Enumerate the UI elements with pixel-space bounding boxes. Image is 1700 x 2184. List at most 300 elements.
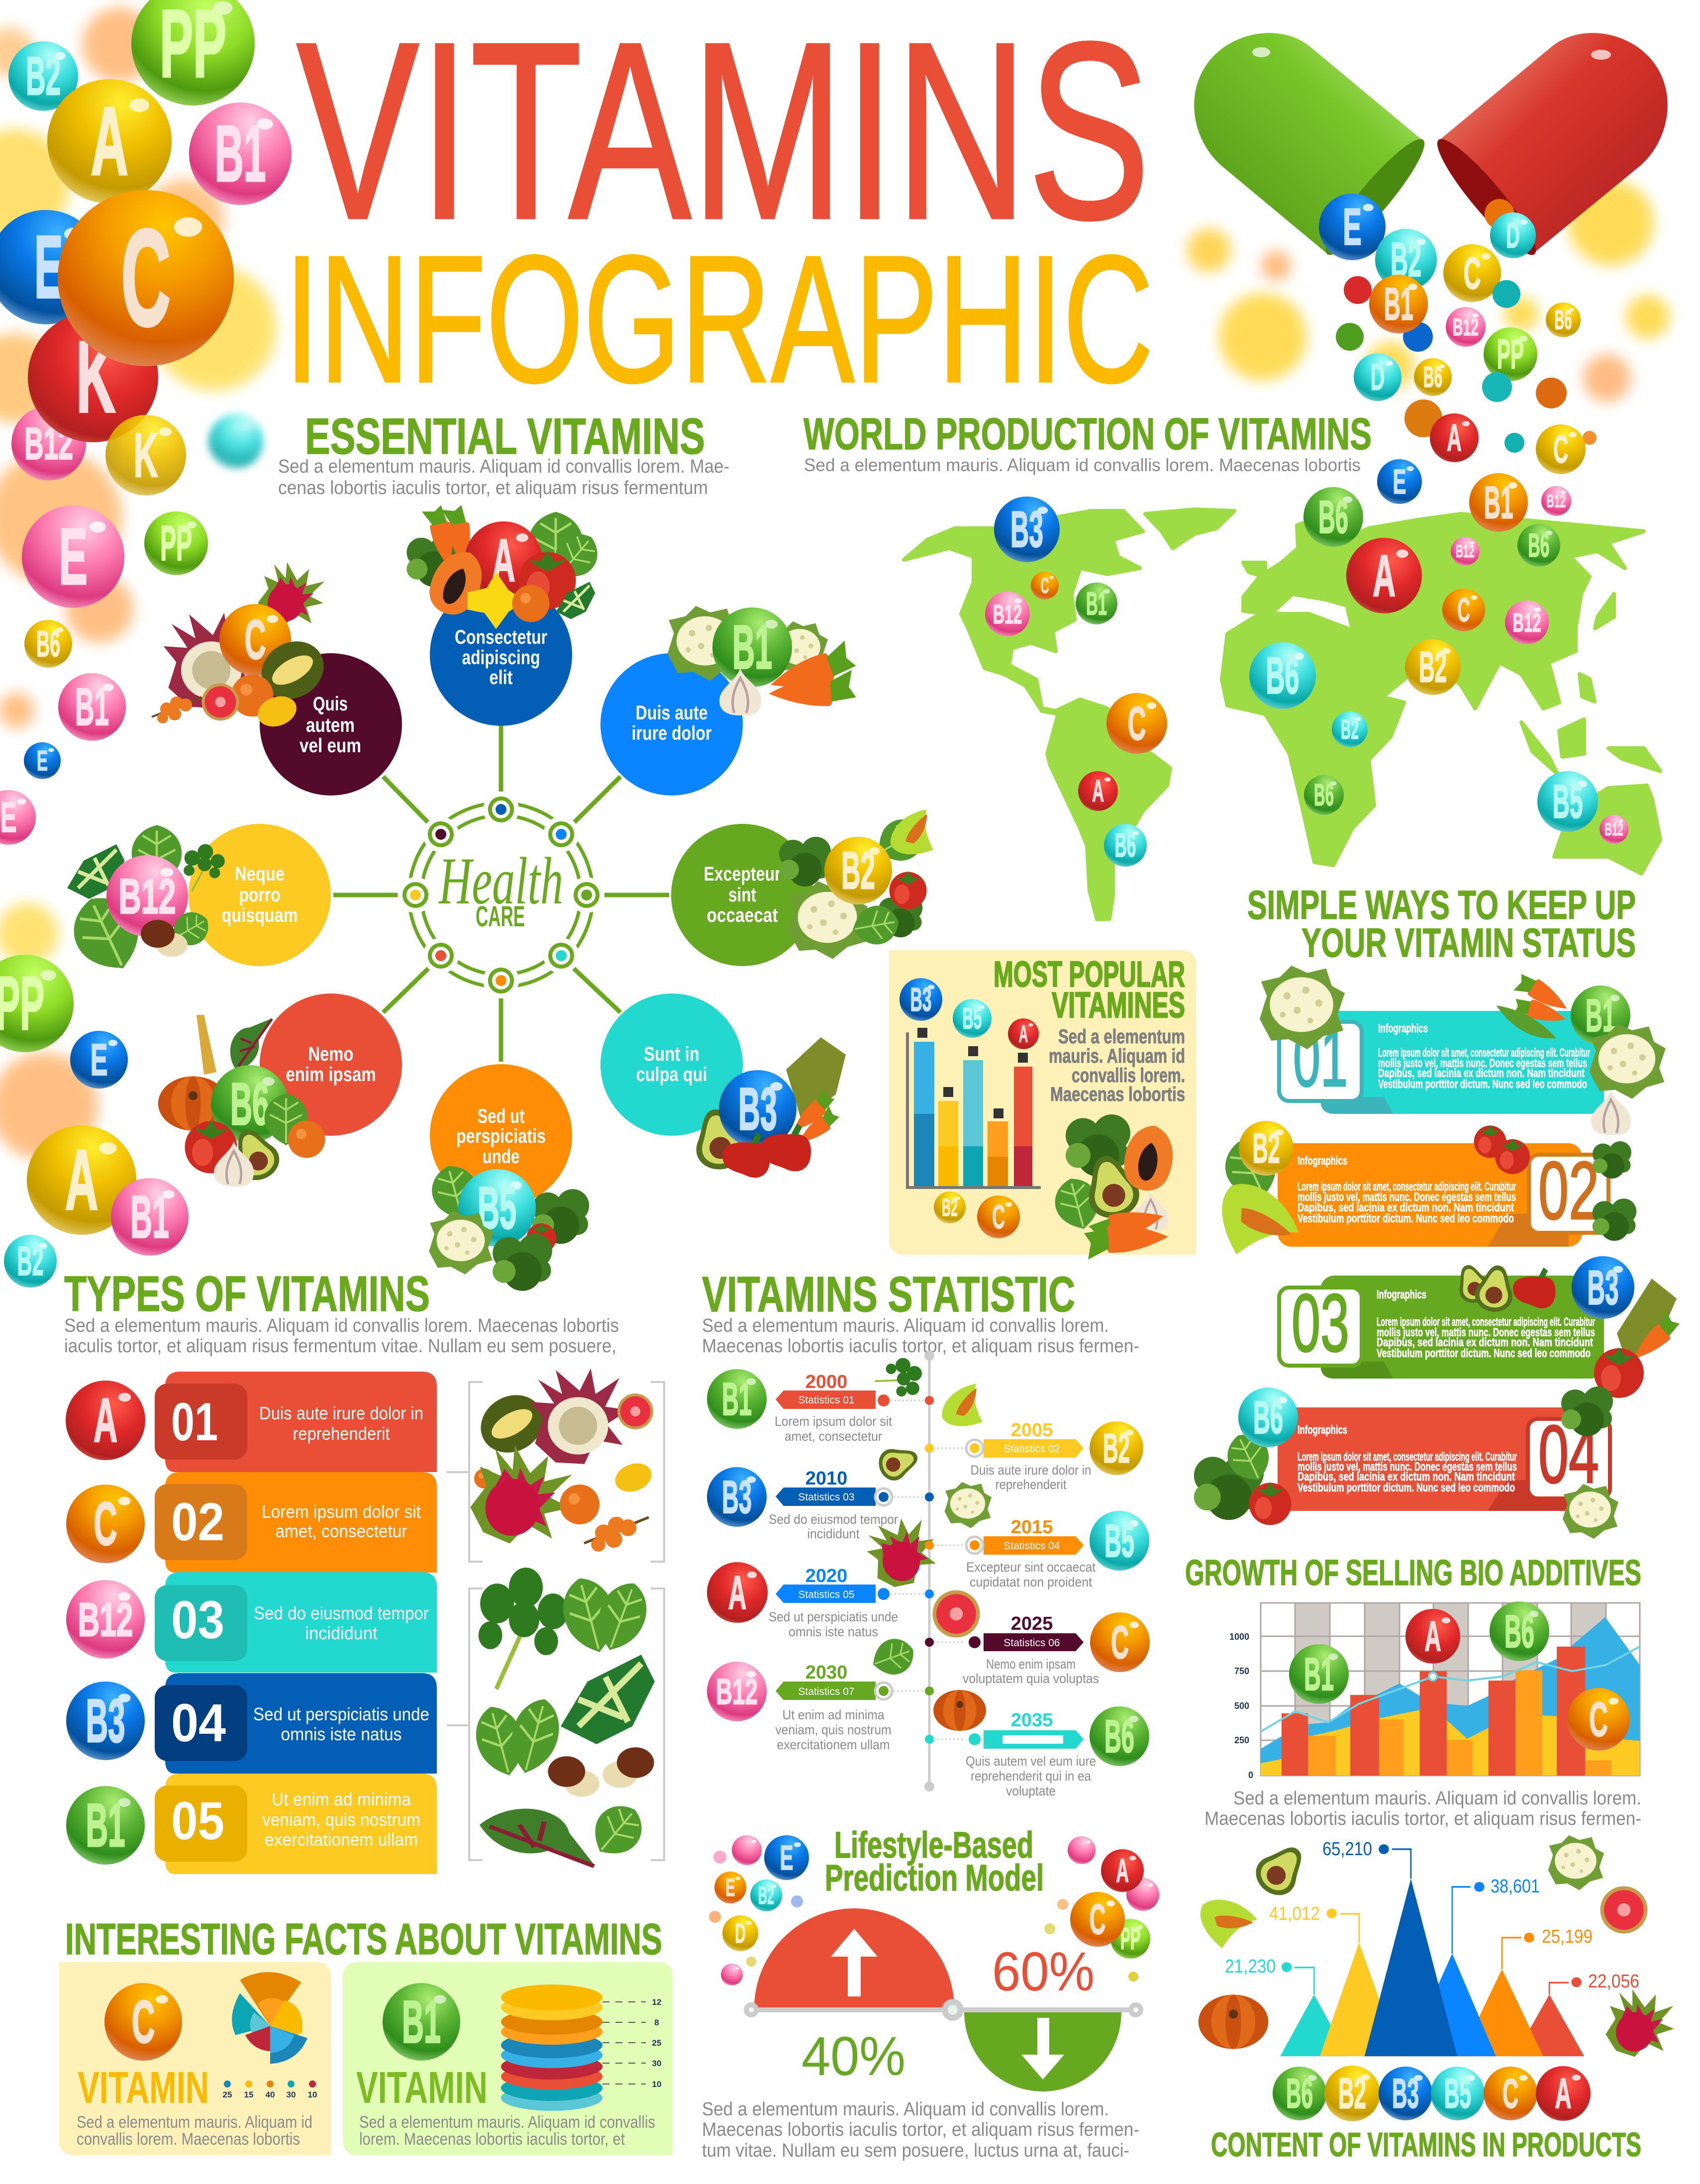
circle: sunt in culpa qui: culpa qui xyxy=(636,1064,707,1086)
text: statistic description: Sed a elementum mauris. Aliquam id convallis lorem. xyxy=(702,1315,1109,1336)
step 04 ribbon xyxy=(1194,1387,1618,1539)
cluster: vitamin B12 foods: B12 xyxy=(119,869,176,923)
chart: growth chart: B6 xyxy=(1504,1605,1534,1657)
text: lifestyle description: Sed a elementum mauris. Aliquam id convallis lorem. xyxy=(702,2099,1109,2120)
row of vitamin balls: A xyxy=(1555,2070,1571,2117)
step 03 ribbon: Vestibulum porttitor dictum. Nunc sed leo commodo xyxy=(1377,1347,1591,1360)
top-left vitamin bubbles: A xyxy=(91,88,128,195)
chart: growth chart: 1000 xyxy=(1229,1632,1249,1642)
chart: world map with vitamin balls: C xyxy=(1128,697,1146,750)
legend: polar pie xyxy=(223,2081,317,2099)
heading: lifestyle-based prediction model xyxy=(825,1824,1044,1898)
2020: Sed ut perspiciatis unde xyxy=(769,1609,898,1624)
item 05 xyxy=(66,1774,437,1874)
heading: lifestyle-based prediction model: Prediction Model xyxy=(825,1857,1044,1898)
chart: world map with vitamin balls: B6 xyxy=(1528,527,1550,564)
2030: B12 xyxy=(716,1672,758,1712)
step 03 ribbon xyxy=(1279,1256,1683,1398)
step 03 ribbon: Infographics xyxy=(1377,1288,1426,1301)
cluster: vitamin C foods: C xyxy=(244,608,266,671)
2020: Statistics 05 xyxy=(798,1589,855,1600)
2005: B2 xyxy=(1103,1425,1130,1472)
cluster: vitamin A foods xyxy=(406,504,607,629)
chart: timeline xyxy=(707,1351,1150,1798)
text: most popular description: mauris. Aliquam id xyxy=(1049,1045,1185,1067)
chart: world map with vitamin balls: B6 xyxy=(1318,491,1348,543)
panel: vitamin B1 fact: VITAMIN xyxy=(356,2063,488,2113)
2035: voluptate xyxy=(1006,1784,1056,1798)
illustration: open capsule pouring vitamins: E xyxy=(1343,199,1362,256)
row of vitamin balls: B5 xyxy=(1444,2070,1471,2117)
bubbles: left of lifestyle model: E xyxy=(780,1838,794,1877)
text: lifestyle description: tum vitae. Nullam eu sem posuere, luctus urna at, fauci- xyxy=(702,2140,1129,2161)
2020: omnis iste natus xyxy=(789,1624,878,1639)
cluster: foods xyxy=(1050,1114,1178,1260)
legend: polar pie: 40 xyxy=(266,2090,275,2099)
center label: health care xyxy=(438,844,563,933)
labels: stacked discs: 10 xyxy=(652,2080,661,2089)
2020: A xyxy=(728,1566,746,1619)
circle: excepteur sint occaecat: occaecat xyxy=(706,904,778,926)
center label: health care: Health xyxy=(438,844,563,918)
2035: Statistics 08 xyxy=(1003,1734,1060,1746)
row of vitamin balls: C xyxy=(1502,2070,1518,2117)
item 02: C xyxy=(94,1489,117,1558)
heading: vitamins statistic: VITAMINS STATISTIC xyxy=(702,1267,1075,1322)
item 04 xyxy=(66,1673,437,1774)
list: types of vitamins xyxy=(66,1372,437,1874)
text: most popular description: convallis lorem. xyxy=(1072,1065,1185,1087)
chart: world map with vitamin balls: B6 xyxy=(1314,778,1334,812)
cluster: vitamin B1 foods: B1 xyxy=(732,613,772,682)
2010: Sed do eiusmod tempor xyxy=(769,1512,898,1527)
legend: polar pie: 30 xyxy=(287,2090,296,2099)
labels: stacked discs: 30 xyxy=(652,2059,661,2068)
2035: Quis autem vel eum iure xyxy=(966,1754,1096,1769)
step 02 ribbon: Vestibulum porttitor dictum. Nunc sed leo commodo xyxy=(1298,1212,1514,1225)
chart: content of vitamins triangles: 41,012 xyxy=(1269,1903,1320,1924)
item 01 xyxy=(66,1372,437,1472)
2025: C xyxy=(1111,1616,1129,1668)
text: types description: iaculis tortor, et aliquam risus fermentum vitae. Nullam eu sem posuere, xyxy=(64,1336,616,1357)
chart: world map with vitamin balls: B3 xyxy=(1010,500,1043,558)
labels: stacked discs xyxy=(602,1997,661,2089)
2005: Statistics 02 xyxy=(1003,1443,1060,1455)
chart: content of vitamins triangles: 21,230 xyxy=(1225,1956,1276,1977)
text: growth description: Sed a elementum mauris. Aliquam id convallis lorem. xyxy=(1233,1788,1641,1809)
2030: exercitationem ullam xyxy=(777,1737,890,1752)
circle: neque porro quisquam xyxy=(189,824,331,966)
top-left vitamin bubbles xyxy=(0,0,292,585)
labels: stacked discs: 12 xyxy=(652,1997,661,2007)
circle: sed ut perspiciatis unde: perspiciatis xyxy=(456,1125,546,1147)
chart: world map with vitamin balls: C xyxy=(1457,592,1470,629)
number: 40 percent: 40% xyxy=(801,2026,905,2087)
illustration: open capsule pouring vitamins: A xyxy=(1447,417,1462,459)
heading: most popular vitamines xyxy=(994,955,1185,1025)
circle: quis autem vel eum xyxy=(260,653,402,795)
text: essential vitamins description: cenas lobortis iaculis tortor, et aliquam risus fermentum xyxy=(278,478,708,498)
text: world production description: Sed a elementum mauris. Aliquam id convallis lorem. Maecenas lobortis xyxy=(804,455,1361,475)
chart: world map with vitamin balls: B2 xyxy=(1341,713,1359,745)
2010: B3 xyxy=(722,1471,752,1523)
chart: growth chart: 0 xyxy=(1248,1770,1253,1780)
panel: vitamin C fact: VITAMIN xyxy=(78,2063,209,2113)
circle: nemo enim ipsam: Nemo xyxy=(308,1043,353,1065)
illustration: open capsule pouring vitamins: C xyxy=(1553,428,1568,471)
heading: essential vitamins: ESSENTIAL VITAMINS xyxy=(305,408,705,465)
left column vitamin bubbles: B1 xyxy=(75,678,109,736)
top-left vitamin bubbles: B12 xyxy=(24,419,73,469)
step 02 ribbon: Lorem ipsum dolor sit amet, consectetur adipiscing elit. Curabitur xyxy=(1298,1180,1516,1193)
2010: incididunt xyxy=(807,1526,860,1541)
item 01: reprehenderit xyxy=(293,1423,390,1444)
2030: Ut enim ad minima xyxy=(782,1707,885,1722)
foods for step 03: B3 xyxy=(1588,1260,1618,1314)
2020 xyxy=(707,1562,934,1639)
bracket: vegetables xyxy=(447,1568,664,1867)
top-left vitamin bubbles: B1 xyxy=(214,109,266,198)
bubbles: left of lifestyle model: E xyxy=(725,1874,735,1901)
circle: excepteur sint occaecat: sint xyxy=(728,884,756,906)
step 03 ribbon: mollis justo vel, mattis nunc. Donec egestas sem tellus xyxy=(1377,1326,1595,1339)
text: types description xyxy=(64,1315,619,1357)
panel: vitamin C fact xyxy=(59,1962,331,2155)
top-left vitamin bubbles: C xyxy=(121,202,171,354)
left column vitamin bubbles: B1 xyxy=(130,1183,169,1250)
2005: reprehenderit xyxy=(995,1477,1067,1492)
foods for step 01 xyxy=(1260,966,1666,1135)
step 04 ribbon: Dapibus, sed lacinia ex dictum non. Nam tincidunt xyxy=(1298,1470,1515,1484)
chart: growth chart: 500 xyxy=(1234,1701,1249,1711)
text: types description: Sed a elementum mauris. Aliquam id convallis lorem. Maecenas lobortis xyxy=(64,1315,619,1336)
text: growth description xyxy=(1204,1788,1641,1829)
foods for step 04 xyxy=(1194,1387,1618,1539)
item 03 xyxy=(66,1572,437,1673)
2025: 2025 xyxy=(1011,1613,1053,1634)
chart: world map with vitamin balls: B12 xyxy=(1546,491,1566,511)
text: lifestyle description xyxy=(702,2099,1139,2161)
2025: Nemo enim ipsam xyxy=(986,1657,1076,1672)
top-left vitamin bubbles: K xyxy=(134,420,158,490)
chart: world map with vitamin balls: B5 xyxy=(1552,775,1583,828)
bubbles: left of lifestyle model xyxy=(709,1835,809,1985)
legend: polar pie: 15 xyxy=(244,2090,253,2099)
item 02: Lorem ipsum dolor sit xyxy=(262,1501,421,1522)
2000: 2000 xyxy=(805,1372,847,1392)
icons: popular vitamins: B5 xyxy=(963,1001,982,1035)
cluster: vitamin B5 foods xyxy=(426,1160,589,1291)
2015: 2015 xyxy=(1011,1517,1053,1538)
cluster: vitamin B1 foods xyxy=(668,606,858,715)
illustration: open capsule pouring vitamins: B1 xyxy=(1384,279,1413,329)
circle: quis autem vel eum: Quis xyxy=(313,693,348,715)
2010: 2010 xyxy=(805,1468,847,1489)
chart: world map with vitamin balls: B2 xyxy=(1419,643,1447,692)
chart: world map with vitamin balls: A xyxy=(1373,542,1396,608)
cluster: vitamin B6 foods: B6 xyxy=(230,1070,269,1137)
step 01 ribbon: Dapibus, sed lacinia ex dictum non. Nam tincidunt xyxy=(1378,1067,1585,1080)
step 01 ribbon: Vestibulum porttitor dictum. Nunc sed leo commodo xyxy=(1378,1078,1587,1091)
2030: veniam, quis nostrum xyxy=(775,1722,892,1737)
2005: Duis aute irure dolor in xyxy=(970,1463,1092,1478)
number: 60 percent: 60% xyxy=(992,1941,1095,2002)
2015: cupidatat non proident xyxy=(970,1575,1092,1589)
step 02 ribbon xyxy=(1216,1121,1636,1256)
bubbles: right of lifestyle model: A xyxy=(1116,1853,1129,1889)
left column vitamin bubbles: A xyxy=(65,1133,98,1227)
left column vitamin bubbles: B6 xyxy=(36,623,60,664)
illustration: open capsule pouring vitamins: D xyxy=(1371,356,1385,397)
icons: popular vitamins xyxy=(900,978,1039,1238)
2025 xyxy=(925,1612,1150,1686)
text: lifestyle description: Maecenas lobortis iaculis tortor, et aliquam risus fermen- xyxy=(702,2119,1139,2140)
2000: Statistics 01 xyxy=(798,1394,855,1406)
icons: popular vitamins: C xyxy=(992,1199,1005,1236)
item 01: 01 xyxy=(171,1391,218,1452)
circle: consectetur adipiscing elit xyxy=(430,584,572,726)
2035 xyxy=(925,1706,1149,1798)
text: statistic description xyxy=(702,1315,1139,1357)
circle: sunt in culpa qui: Sunt in xyxy=(644,1043,700,1065)
circle: duis aute irure dolor: irure dolor xyxy=(632,722,711,744)
2015 xyxy=(925,1511,1149,1589)
2015: Excepteur sint occaecat xyxy=(966,1560,1096,1575)
item 05: B1 xyxy=(86,1791,125,1859)
chart: polar pie xyxy=(232,1972,307,2064)
circle: sed ut perspiciatis unde: unde xyxy=(483,1146,519,1168)
circle: sed ut perspiciatis unde: Sed ut xyxy=(478,1105,524,1127)
2020: 2020 xyxy=(805,1566,847,1587)
item 03: 03 xyxy=(171,1589,224,1650)
row of vitamin balls: B6 xyxy=(1286,2070,1313,2117)
row of vitamin balls: B3 xyxy=(1392,2070,1419,2117)
bubbles: right of lifestyle model xyxy=(1044,1836,1159,1982)
text: essential vitamins description xyxy=(278,456,729,498)
top-left vitamin bubbles: B2 xyxy=(26,46,61,106)
2015: Statistics 04 xyxy=(1003,1540,1060,1552)
item 05: veniam, quis nostrum xyxy=(262,1809,420,1830)
chart: stacked discs xyxy=(501,1985,602,2111)
left column vitamin bubbles: B2 xyxy=(17,1239,43,1284)
step 02 ribbon: mollis justo vel, mattis nunc. Donec egestas sem tellus xyxy=(1298,1191,1516,1204)
bracket: fruits xyxy=(447,1369,664,1562)
cluster: vitamin B3 foods: B3 xyxy=(738,1075,777,1142)
foods for step 02: B2 xyxy=(1253,1125,1280,1172)
legend: polar pie: 10 xyxy=(308,2090,317,2099)
text: essential vitamins description: Sed a elementum mauris. Aliquam id convallis lorem. Mae- xyxy=(278,456,729,477)
item 04: 04 xyxy=(171,1692,226,1753)
2030: 2030 xyxy=(805,1662,847,1683)
item 05: exercitationem ullam xyxy=(265,1829,418,1850)
2005: 2005 xyxy=(1011,1420,1053,1441)
step 02 ribbon: Infographics xyxy=(1298,1154,1347,1168)
heading: world production of vitamins: WORLD PRODUCTION OF VITAMINS xyxy=(803,409,1372,459)
circle: excepteur sint occaecat: Excepteur xyxy=(703,863,781,885)
text: most popular description: Maecenas lobortis xyxy=(1050,1084,1185,1105)
center label: health care: CARE xyxy=(476,900,525,933)
cluster: vitamin B2 foods: B2 xyxy=(841,842,875,900)
chart: growth chart: A xyxy=(1425,1613,1441,1660)
foods for step 04: B6 xyxy=(1253,1391,1283,1443)
bubbles: right of lifestyle model: PP xyxy=(1120,1922,1140,1956)
chart: world map with vitamin balls: C xyxy=(1041,574,1049,598)
panel: vitamin C fact: convallis lorem. Maecenas lobortis xyxy=(77,2130,300,2149)
2035: 2035 xyxy=(1011,1710,1053,1731)
step 01 ribbon xyxy=(1260,966,1666,1135)
item 05: 05 xyxy=(171,1790,224,1851)
panel: vitamin B1 fact: lorem. Maecenas lobortis iaculis tortor, et xyxy=(359,2130,625,2149)
circle: sunt in culpa qui xyxy=(600,993,743,1136)
left column vitamin bubbles xyxy=(0,505,208,1288)
icons: popular vitamins: A xyxy=(1019,1021,1028,1047)
labels: stacked discs: 25 xyxy=(652,2038,661,2048)
foods around triangles xyxy=(1194,1835,1682,2065)
illustration: open capsule pouring vitamins: B6 xyxy=(1423,361,1442,394)
cluster: vitamin A foods: A xyxy=(492,526,515,594)
bubbles: left of lifestyle model: B2 xyxy=(758,1882,774,1909)
chart: growth chart xyxy=(1229,1601,1640,1780)
heading: types of vitamins: TYPES OF VITAMINS xyxy=(64,1266,430,1322)
text: growth description: Maecenas lobortis iaculis tortor, et aliquam risus fermen- xyxy=(1204,1808,1641,1829)
2005 xyxy=(925,1420,1143,1492)
left column vitamin bubbles: E xyxy=(59,512,88,601)
2000: B1 xyxy=(722,1373,752,1425)
2015: B5 xyxy=(1104,1515,1134,1567)
2000: Lorem ipsum dolor sit xyxy=(775,1414,892,1429)
chart: world map with vitamin balls: A xyxy=(1092,774,1104,808)
chart: world map with vitamin balls: B12 xyxy=(1456,542,1475,561)
chart: content of vitamins triangles xyxy=(1194,1835,1682,2121)
step 04 ribbon: 04 xyxy=(1538,1408,1599,1500)
cluster: vitamin B12 foods xyxy=(62,825,225,982)
step 02 ribbon: 02 xyxy=(1538,1145,1599,1236)
2000: amet, consectetur xyxy=(785,1429,882,1444)
2025: Statistics 06 xyxy=(1003,1637,1060,1649)
chart: growth chart: 750 xyxy=(1234,1666,1249,1676)
icons: popular vitamins: B2 xyxy=(942,1193,958,1221)
circle: consectetur adipiscing elit: Consectetur xyxy=(455,626,547,648)
chart: world map with vitamin balls: B1 xyxy=(1484,477,1513,528)
bubbles: left of lifestyle model: D xyxy=(735,1917,746,1949)
heading: simple ways xyxy=(1247,883,1636,966)
labels: stacked discs: 8 xyxy=(654,2018,659,2027)
cluster: vitamin B2 foods xyxy=(779,809,933,959)
illustration: open capsule pouring vitamins: PP xyxy=(1497,331,1524,378)
step 04 ribbon: Infographics xyxy=(1298,1423,1347,1437)
text: most popular description: Sed a elementum xyxy=(1058,1026,1185,1048)
step 04 ribbon: mollis justo vel, mattis nunc. Donec egestas sem tellus xyxy=(1298,1460,1517,1474)
cluster: vitamin C foods xyxy=(152,556,334,732)
item 02: amet, consectetur xyxy=(276,1521,407,1541)
item 02: 02 xyxy=(171,1491,224,1552)
item 03: B12 xyxy=(78,1593,133,1646)
cluster: vitamin B3 foods xyxy=(690,1037,846,1178)
item 04: omnis iste natus xyxy=(281,1724,402,1744)
chart: content of vitamins triangles: 22,056 xyxy=(1588,1971,1639,1992)
chart: health care radial diagram xyxy=(62,504,933,1291)
2030 xyxy=(707,1662,934,1752)
item 05: Ut enim ad minima xyxy=(272,1789,411,1809)
panel: vitamin C fact: Sed a elementum mauris. Aliquam id xyxy=(77,2113,312,2132)
illustration: open capsule pouring vitamins: B2 xyxy=(1391,233,1421,287)
top-left vitamin bubbles: K xyxy=(76,320,115,433)
item 01: Duis aute irure dolor in xyxy=(259,1403,423,1423)
2010: Statistics 03 xyxy=(798,1491,855,1503)
panel: vitamin B1 fact: B1 xyxy=(402,1988,441,2055)
chart: world map with vitamin balls: B1 xyxy=(1086,585,1107,621)
bubbles: right of lifestyle model: C xyxy=(1090,1896,1105,1943)
illustration: open capsule pouring vitamins xyxy=(1187,33,1670,474)
illustration: open capsule pouring vitamins: D xyxy=(1506,215,1520,255)
panel: vitamin B1 fact: Sed a elementum mauris. Aliquam id convallis xyxy=(359,2113,655,2132)
chart: content of vitamins triangles: 38,601 xyxy=(1491,1876,1540,1897)
heading: lifestyle-based prediction model: Lifestyle-Based xyxy=(834,1824,1033,1866)
circle: quis autem vel eum: autem xyxy=(306,714,355,736)
circle: duis aute irure dolor: Duis aute xyxy=(636,702,707,724)
circle: neque porro quisquam: Neque xyxy=(235,863,285,885)
heading: most popular vitamines: VITAMINES xyxy=(1052,986,1185,1025)
left column vitamin bubbles: E xyxy=(37,745,48,777)
circle: nemo enim ipsam: enim ipsam xyxy=(286,1064,376,1086)
item 01: A xyxy=(94,1386,117,1455)
chart: vertical bars xyxy=(907,1028,1041,1188)
circle: nemo enim ipsam xyxy=(260,993,402,1136)
item 04: B3 xyxy=(86,1687,125,1755)
step 03 ribbon: 03 xyxy=(1292,1277,1349,1369)
foods for step 02 xyxy=(1216,1121,1636,1256)
circle: consectetur adipiscing elit: elit xyxy=(490,667,512,689)
step 01 ribbon: mollis justo vel, mattis nunc. Donec egestas sem tellus xyxy=(1378,1057,1587,1070)
chart: balance line xyxy=(744,1999,1143,2021)
step 04 ribbon: Vestibulum porttitor dictum. Nunc sed leo commodo xyxy=(1298,1481,1515,1494)
chart: growth chart: B1 xyxy=(1304,1648,1334,1700)
illustration: open capsule pouring vitamins: C xyxy=(1464,249,1481,298)
chart: content of vitamins triangles: 65,210 xyxy=(1322,1839,1372,1860)
step 04 ribbon: Lorem ipsum dolor sit amet, consectetur adipiscing elit. Curabitur xyxy=(1298,1450,1517,1464)
item 03: incididunt xyxy=(305,1623,377,1643)
step 01 ribbon: 01 xyxy=(1293,1012,1348,1103)
row of vitamin balls xyxy=(1273,2066,1591,2121)
item 03: Sed do eiusmod tempor xyxy=(254,1603,429,1623)
timeline foods xyxy=(861,1352,992,1731)
2000 xyxy=(707,1369,934,1444)
text: most popular description xyxy=(1049,1026,1185,1105)
row of vitamin balls: B2 xyxy=(1338,2070,1366,2118)
chart: world map with vitamin balls: B6 xyxy=(1114,827,1136,864)
cluster: vitamin B5 foods: B5 xyxy=(478,1174,516,1241)
item 04: Sed ut perspiciatis unde xyxy=(253,1704,429,1724)
left column vitamin bubbles: PP xyxy=(160,516,192,571)
2035: reprehenderit qui in ea xyxy=(971,1769,1092,1784)
circle: consectetur adipiscing elit: adipiscing xyxy=(462,647,540,669)
2025: voluptatem quia voluptas xyxy=(963,1671,1099,1686)
top-left vitamin bubbles: E xyxy=(34,217,63,316)
chart: world map with vitamin balls: B12 xyxy=(1604,820,1623,839)
chart: green half circle with down arrow xyxy=(964,2012,1121,2091)
chart: world map with vitamin balls: B6 xyxy=(1266,647,1300,705)
item 02 xyxy=(66,1472,437,1573)
foods for step 03 xyxy=(1452,1256,1683,1398)
step 01 ribbon: Infographics xyxy=(1378,1022,1428,1035)
chart: world map with vitamin balls: B12 xyxy=(1512,608,1541,637)
chart: world map with vitamin balls xyxy=(904,459,1660,919)
chart: world map with vitamin balls: B12 xyxy=(993,599,1022,629)
circle: sed ut perspiciatis unde xyxy=(430,1064,572,1206)
heading: interesting facts: INTERESTING FACTS ABOUT VITAMINS xyxy=(65,1914,662,1964)
icons: popular vitamins: B3 xyxy=(910,982,932,1018)
illustration: open capsule pouring vitamins: B6 xyxy=(1554,305,1572,335)
